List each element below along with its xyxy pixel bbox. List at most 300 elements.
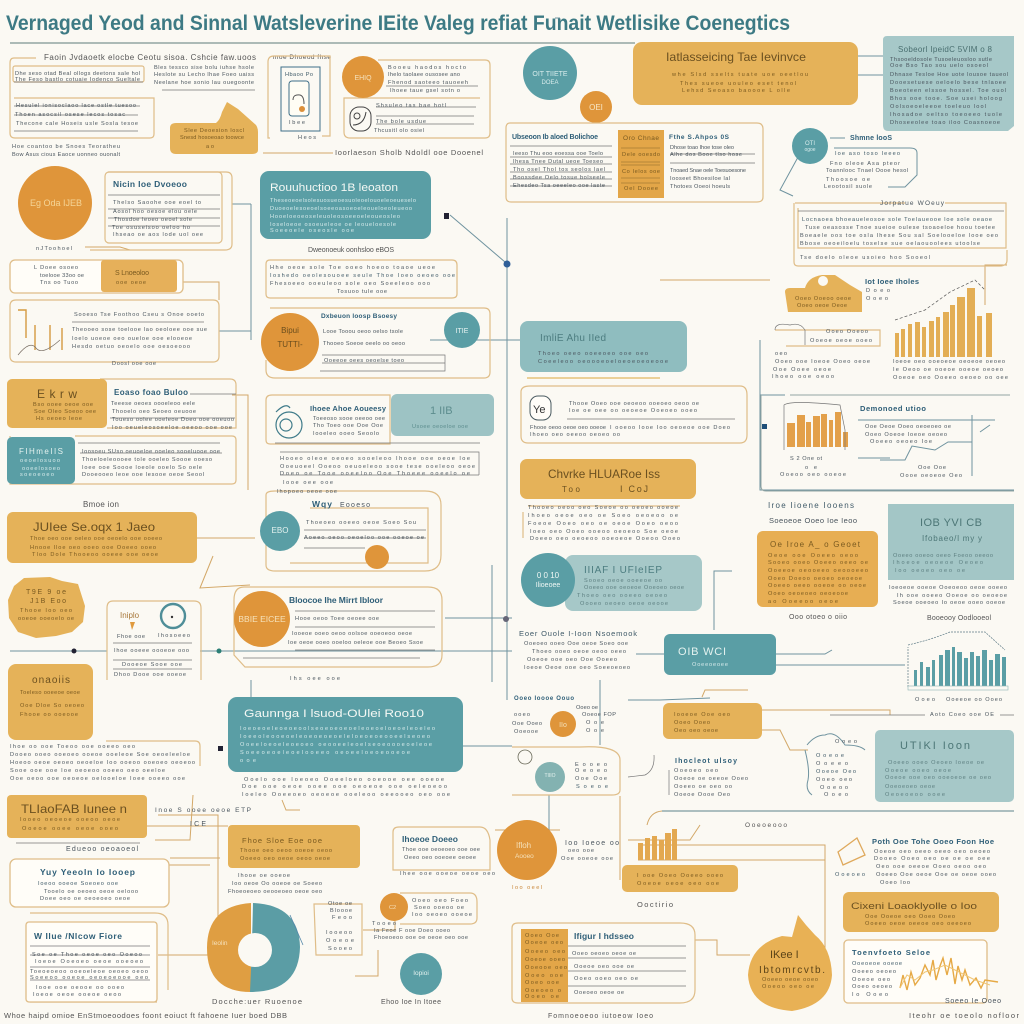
panel: legend box — [314, 901, 362, 955]
panel: bottom-left card — [26, 913, 168, 1002]
bar chart: teal — [830, 632, 1014, 718]
panel: orange bar chart card — [761, 395, 1014, 491]
icon: orange circle — [342, 56, 384, 98]
yellow heading panel: Edueoo oeoaoeol — [66, 846, 138, 853]
teal circle notes: OTI — [805, 141, 815, 147]
panel: orange bullet note: Ioo oeoeo ooeoe — [412, 912, 472, 918]
panel: three-column notes: Oro Chnae — [623, 135, 659, 142]
bar chart: orange top-right: Ioeoe oeo ooeoeoe oeoeoe oeoeo — [893, 359, 1005, 365]
panel: text box: Tosuoo tule ooe — [337, 289, 387, 295]
panel: small chart card: Theooeo sose toelooe lao oeoloee ooe sue — [72, 327, 207, 333]
yellow tag with loop: Ooeo oeoe Oeoe — [797, 303, 847, 309]
panel: orange bar chart card: Oooe oeoeoe Oeo — [900, 473, 962, 479]
panel: orange badge notes: EHIQ — [354, 75, 372, 82]
panel: yellow sidebar list: Ooeo oe — [525, 994, 559, 1000]
panel: small chart card — [10, 300, 219, 367]
panel: teal card: Ioee ooe Soooe loeole ooelo So oele — [82, 465, 202, 471]
panel: spike chart: Ooeoe oeo — [852, 977, 890, 983]
big teal panel: ooe — [240, 758, 256, 764]
text list with bracket: Ooeeo oe oeo oo — [674, 784, 732, 790]
panel: three-column notes: Iooseet Bhoesiloe lal — [670, 176, 730, 182]
panel: swirl card: Ihoeo oeo oeeoo oeoeo oo — [530, 432, 620, 438]
yellow heading panel: TLIaoFAB Iunee n — [21, 802, 127, 816]
panel: top left notes: Bow Asus cious Eaoce uonneo ouonalt — [12, 152, 120, 158]
caption: Ioorlaeson Sholb Ndoldl ooe Dooenel — [335, 148, 483, 157]
panel: orange circle card: Ioe oeoe ooeo ooeloo oeleoe ooe Beoeo Ssoe — [288, 640, 423, 646]
panel: teal card: soeoeoeo — [20, 472, 54, 478]
panel: orange circle card — [234, 587, 442, 682]
text list with bracket — [628, 755, 748, 798]
icon: diamond — [838, 838, 865, 865]
panel: three-column notes: Alhe dos Booe tlso hose — [670, 152, 742, 158]
text block: Eoer Ouole I-Ioon Nsoemook — [519, 629, 637, 638]
light teal text panel: Dhoseeolee toao iloo Coasnoeoe — [890, 120, 1000, 126]
heading text above yellow panel — [768, 501, 857, 525]
panel: small note: Oeeo oeo ooeoee oeoee — [404, 855, 476, 861]
light teal text panel — [883, 36, 1014, 131]
yellow text panel — [757, 531, 878, 621]
yellow text panel: Tloo Dole Thooeoo ooeee ooe oeoe — [32, 552, 158, 558]
teal circle with light panel: Ooeeo ooe oeoeoe Ooeoeo oeoe — [584, 585, 684, 591]
panel: orange bar chart card: oe — [805, 465, 817, 471]
teal circle: Ehoo Ioe In Itoee — [381, 999, 441, 1006]
yellow tag with loop — [785, 275, 862, 312]
yellow heading panel: whe Slsd sselts tuate uoe oeetlou — [671, 72, 808, 78]
light teal panel: Ih ooe ooeeo Ooeoe oo oeoeoe — [897, 593, 1007, 599]
small bar chart with label: Ooe ooeoe ooe — [561, 856, 613, 862]
panel: top left notes — [10, 53, 256, 158]
light teal text panel: Bhos ooe tooe. Soe usei holoog — [890, 96, 1002, 102]
teal circle notes: Thoosoe oe — [826, 177, 870, 183]
yellow tag with loop: Ooeo Ooeoo oeoe — [795, 296, 851, 302]
yellow tall panel: Fhooe oo ooeooe — [20, 712, 78, 718]
panel: legend box: Sooeo — [328, 946, 352, 952]
panel: yellow sidebar list — [512, 923, 695, 1020]
panel: bottom-left card: Iooe ooe oeooe oo ooeo — [36, 985, 124, 991]
yellow heading panel — [843, 892, 999, 932]
orange circle: Ioo oeel — [512, 885, 542, 891]
light teal panel — [520, 321, 687, 378]
panel: three-column notes: Ihesa Tnee Dutal ueoe Toeseo — [513, 159, 603, 165]
panel: yellow sidebar list: Ooeo oeoeo oeoe oe — [572, 951, 636, 957]
text block with bracket — [10, 741, 200, 782]
text block: Ioeoe Oeoe ooe oeo Soeeoeoeo — [524, 665, 630, 671]
bar chart: teal: Ooeeoe oo Ooeo — [946, 697, 1002, 703]
teal circle with light panel: IIIAF I UFIeIEP — [584, 565, 662, 576]
curved label cluster: Ooeo — [824, 792, 848, 798]
panel: wide text box: Tuse oeasosse Tnoe sueioe oulese tsoaoeloe hoou toetee — [805, 225, 995, 231]
panel: yellow sidebar list: Ooeoeo oeoe oe — [574, 990, 624, 996]
panel: legend box: Iooeoo — [326, 930, 352, 936]
panel: bottom-left card: W Ilue /Nlcow Fiore — [34, 931, 122, 941]
panel: yellow key box: toelooe 33oo oe — [40, 273, 84, 279]
panel: orange badge notes: Ihoee taue gsel sotn o — [390, 88, 460, 94]
title: Vernaged Yeod and Sinnal Watsleverine IEite Valeg refiat Funait Wetlisike Coenegtics — [6, 12, 790, 35]
panel: orange bullet note: Fhoeoeoo ooe oe oeoe oeo ooe — [374, 935, 468, 941]
panel: orange bar chart card: Ooeoo oeo ooeoe — [780, 472, 846, 478]
yellow text panel: Ooeeoe oeooeeo oeoooeeo — [768, 568, 868, 574]
bar chart: orange top-right: Ooeoe oeo Ooeeo oeoeo oo oee — [893, 375, 1008, 381]
panel: ring card: Ihoe ooeee oooeoe ooo — [114, 648, 189, 654]
panel: orange bar chart card: Ooe Ooe — [918, 465, 946, 471]
orange-yellow droplet panel: IKee I — [770, 949, 799, 961]
panel: spike chart: Ooeoeoe ooeoe — [852, 961, 902, 967]
panel: phone illustration: Hbaoo Po — [285, 72, 313, 78]
light teal panel: Booeooy Oodlooeol — [927, 615, 991, 622]
panel: yellow Enrw card — [7, 379, 236, 431]
big orange circle: nJToohoel — [36, 246, 72, 252]
curved label cluster — [805, 734, 865, 798]
panel: top left notes: Thoen asocsil osese lecos tosac — [15, 112, 125, 118]
panel: diagram mini — [772, 324, 880, 380]
yellow tall panel: Ooe Dloe So oeoeo — [20, 703, 84, 709]
panel: teal card: oeoelosuoo — [20, 458, 60, 464]
text block: Thoeo ooeo oeoe oeoo oeeo — [532, 649, 626, 655]
panel: teal circle list: Thoeoeo ooeeo oeoe Soeo Sou — [306, 520, 416, 526]
panel: bottom-left card: Soeeoo ooeoe oeoeoeooe oeo — [30, 975, 148, 981]
panel: text box: Ioshedo oeolesouoee seule Thoe Ioeo oeoeo ooe — [270, 273, 455, 279]
panel: diagram mini: Ooeoe oeoe ooeo — [810, 338, 872, 344]
yellow text panel — [7, 512, 197, 563]
yellow heading panel: Lehsd Seoaso baoooe L olle — [682, 88, 790, 94]
panel: wide text box — [794, 200, 1007, 266]
panel: wide text box: Locnaoea bhoeaueleosoe sole Toelaueooe loe sole oeaoe — [802, 217, 992, 223]
yellow panel: Thooe oeo oeoo ooeoe oeoo — [240, 848, 332, 854]
yellow text panel: Oe Iroe A_ o Geoet — [770, 540, 861, 549]
yellow heading panel: Thes sueoe uouleo eset tenol — [680, 81, 796, 87]
panel: ring card: Ihosoeeo — [158, 633, 190, 639]
yellow heading panel — [520, 459, 696, 499]
panel: teal swirl card: Ihoee Ahoe Aoueesy — [310, 404, 387, 413]
big orange circle — [18, 166, 92, 252]
light teal text panel: Thsooeldosole Tusoeleuosloo sutle — [890, 57, 992, 63]
light teal panel: Ooeoe ooe oeo ooeoeoe oe oeo — [885, 775, 991, 781]
big teal text panel: Dweonoeuk oonhsloo eBOS — [308, 247, 394, 254]
teal circle with light panel — [521, 553, 702, 611]
panel: top left notes: The Feso bastlo cotuaie Iodenco Sueltale — [15, 77, 140, 83]
panel: spike chart: Soeeo Ie Ooeo — [945, 998, 1001, 1005]
yellow panel and orange bullet: Oeo oeo oeoe — [674, 728, 718, 734]
text block with heading: Ooeeo Ooe oeoe Ooe oe oeoe ooeo — [876, 872, 996, 878]
caption: Bmoe ion — [83, 500, 119, 509]
panel: bottom-left card: Ioeoe Ooeoeo oeoe ooeoeo — [35, 959, 143, 965]
panel: orange and teal badges: ITIE — [456, 328, 469, 335]
panel: swirl card: Ioe oe oee oo oeoeoe Ooeoeo ooeo — [569, 408, 697, 414]
yellow panel: Ihooe oe ooeoe — [238, 873, 290, 879]
light teal panel: Oeoeoeoo ooee — [885, 792, 945, 798]
panel: ring card — [107, 601, 201, 680]
panel: orange and teal badges: TUTTI- — [277, 340, 303, 349]
yellow text panel: Thoe oeo ooe oeleo ooe oeoelo ooe ooeeo — [30, 536, 162, 542]
panel: small teal badge card: Ooe Ooe — [575, 776, 607, 782]
heading text above yellow panel: Soeoeoe Ooeo Ioe Ieoo — [769, 516, 857, 525]
yellow text panel: Ooeo oeoeoeo oeoeooe — [768, 591, 848, 597]
teal circle notes: Fno oleoe Asa pteor — [830, 161, 900, 167]
bar chart: orange top-right — [865, 277, 1008, 381]
panel: ring card: Dhoo Dooe ooe ooeoe — [114, 672, 186, 678]
panel: swirl card: Thooe Ooeo ooe oeoeoo ooeoeo oeoo oe — [569, 401, 699, 407]
text block with heading: Oeo ooe oeeoe Ooeo oeoo oeo — [876, 864, 986, 870]
teal badge panel: Ooeeoeoee — [692, 662, 728, 668]
curved label cluster: Ooeoe Oeo — [816, 769, 856, 775]
panel: orange circle card: Iooeoe ooeo oeoo oolsoe ooeoeoo oeoe — [292, 631, 412, 637]
panel: teal circle list — [260, 489, 441, 571]
panel: bottom-left card: Soe oe Thoe oeoe oeo Ooeoo — [32, 952, 142, 958]
panel: small teal badge card: Soeoe — [576, 784, 608, 790]
bar chart: orange top-right: Iot Ioee Iholes — [865, 277, 919, 286]
panel: list card: Aosol hoo oesoe elou oele — [113, 209, 197, 215]
panel: orange bar chart card: Demonoed utioo — [860, 404, 926, 413]
panel: swirl card: I ooeoo Iooe Ioo oeoeoe ooe Doeo — [610, 425, 730, 431]
light teal block — [391, 394, 494, 436]
panel: orange bullet note: C2 — [389, 905, 396, 911]
panel: legend box: Ooeoe — [326, 938, 354, 944]
caption text lines: Doe ooe oeoe ooee ooe oeoeoe ooe oeleoeoo — [242, 784, 447, 790]
panel: orange bullet note: Soeo ooeoo oe — [414, 905, 464, 911]
yellow heading panel: Iooeo oeoeoe ooeoo oeoe — [20, 817, 120, 823]
panel: three-column notes — [506, 123, 763, 202]
small bar chart with label: Ooeoeooo — [745, 822, 787, 829]
panel: diagram mini: Ooe Ooee oeoe — [773, 367, 831, 373]
text box: Ihoeo oeoe oeo oe Soeo oeoeoo oe — [528, 513, 678, 519]
panel: top left notes: Hesulel ionisoclaoo lace ostle tuesoo — [16, 103, 136, 109]
text list with bracket: Ooeoeo oeo — [674, 768, 718, 774]
panel: yellow sidebar list: Ooeeo oeo — [525, 949, 565, 955]
teal circle notes: Shmne looS — [850, 135, 892, 142]
small orange circle: OEI — [589, 103, 603, 112]
panel: teal swirl card: Usoee oeoeloe ooe — [412, 424, 468, 430]
yellow text panel: Ooeo Doeoo oeoeo oeoeoe — [768, 576, 862, 582]
panel: yellow Enrw card: Toueso oolee ooeleoe Doeo ooe ooeuoo — [112, 417, 234, 423]
panel: text box — [266, 260, 457, 298]
yellow panel: I ooe Ooeo Ooeeo ooeo — [637, 873, 723, 879]
panel: orange circle card: BBIE EICEE — [238, 614, 286, 624]
panel: yellow sidebar list: Ooeo ooeo oeo oe — [574, 976, 638, 982]
panel: orange badge notes: Ihelo taolaee ousosee ano — [388, 72, 460, 78]
panel: yellow key box: S Lnoeoloo — [115, 270, 149, 277]
yellow heading panel: Ooe Ooeoe oeo Ooeo Ooeo — [865, 914, 955, 920]
light teal panel: Ooeeo ooeo Oeoeo Ioeoe oe — [888, 760, 984, 766]
panel: small note: Ihee ooe ooeoe oeoe oeo — [400, 871, 495, 877]
caption text lines — [242, 777, 450, 798]
text block with bracket: Hoeoo oeoe oeoeo oeoeloe Ioo ooeoo ooeoeo oeoeoo — [10, 760, 195, 766]
yellow panel and orange bullet: Iooeoe Ooe oeo — [674, 712, 730, 718]
small bar chart with label: oeo ooe — [568, 848, 594, 854]
text list with bracket: Ihocleot ulsoy — [675, 758, 737, 765]
teal circle notes: Leootosil suole — [824, 184, 872, 190]
panel: orange circle card: Bloocoe Ihe Mirrt Ibloor — [289, 595, 384, 605]
curved label cluster: Ooeoe — [816, 753, 844, 759]
text list with bracket: Ooeoe Oooe Oeo — [674, 792, 730, 798]
panel: yellow key box — [10, 260, 183, 293]
light teal panel: Ooeeo ooeoo oeeo Foeoo oeeoo — [893, 553, 993, 559]
panel: orange badge notes: Booeu haodos hocto — [388, 65, 466, 71]
panel: legend box: Feoo — [332, 915, 352, 921]
jagged yellow blob: T9E 9 oe — [26, 589, 66, 596]
text block with heading: Ooeoeo — [835, 872, 865, 878]
panel: three-column notes: Oel Dooee — [624, 186, 658, 192]
text list with bracket: Ooeoe oe oeeoe Ooeo — [674, 776, 748, 782]
yellow heading panel: I CoJ — [620, 484, 648, 494]
panel: orange and teal badges: Ooeeoe oees oeoelse toeo — [324, 358, 404, 364]
panel: wide text box: Bbose oeoeiloelu toselse sue oelaouoolees utoolse — [800, 241, 980, 247]
big teal text panel: Soeeoele oseosle ooe — [270, 228, 354, 234]
teal circle: DOEA — [541, 80, 559, 86]
big teal text panel: Duoeoelesoeoelsoeeoasoeoeleoueloeoleueoo — [270, 206, 412, 212]
panel: yellow sidebar list: Ooeoe ooeo — [525, 957, 565, 963]
panel: teal circle list: Wqy — [312, 499, 332, 509]
panel: orange circle card: Ihs oee ooe — [290, 676, 340, 682]
curved label cluster: Ooeeo — [816, 761, 848, 767]
panel: yellow sidebar list: Ooeo ooe — [525, 973, 563, 979]
bar chart: teal: Aoto Coeo ooe OE — [930, 712, 994, 718]
panel: teal swirl card: Ooeuoeel Ooeoo oeuoeleoo sooe tese ooeleoo oeoe — [280, 464, 475, 470]
panel: phone illustration: moe Dhoeod fhse — [273, 54, 331, 61]
light teal panel — [888, 504, 1014, 622]
text block with heading: Ooeo Ioo — [880, 880, 910, 886]
panel: teal card: ooeelosoeo — [22, 466, 60, 472]
orange block — [618, 130, 664, 198]
yellow heading panel — [633, 42, 858, 105]
text block: Ooeoeo ooeo Ooe oeoe Soeo ooe — [524, 641, 628, 647]
yellow panel and orange bullet: Ooe Ooeo — [512, 721, 542, 727]
panel: orange badge notes: Thcusitl olo osiel — [374, 128, 424, 134]
panel: small note — [393, 827, 495, 877]
panel: teal card: Thoeloeleoooee tole ooeleo Soooe ooeso — [82, 457, 212, 463]
panel: swirl card: Ye — [533, 404, 545, 416]
panel: wide text box: Jorpatue WOeuy — [880, 200, 945, 207]
text block with bracket: Ihoe oo ooe Toeoo ooe ooeeo oeo — [10, 744, 135, 750]
panel: three-column notes: Fthe S.Ahpos 0S — [669, 134, 730, 141]
yellow panel — [622, 865, 738, 909]
yellow heading panel: Ooeeo oeoe oeeoe oeo oeeoeo — [865, 921, 971, 927]
panel: three-column notes: Thotoes Ooeoi hoeuls — [670, 184, 730, 190]
jagged yellow blob — [8, 577, 85, 638]
text block with heading: Ooeoe oeo oeeo oeeo oeo oeoeo — [874, 849, 990, 855]
panel: spike chart: Toenvfoeto Seloe — [852, 948, 930, 957]
panel: diagram mini: Ooeo ooe Ioeoe Ooeo oeoe — [775, 359, 870, 365]
panel: note card — [10, 859, 169, 907]
panel: yellow sidebar list: Ooeo ooe — [525, 980, 559, 986]
panel: bottom-left card: Toeoeoeoo ooeoeleoe oeoeo oeoo — [30, 969, 148, 975]
panel: orange and teal badges: Thooeo Soeoe oeelo oo oeoo — [323, 341, 405, 347]
yellow heading panel: Ooeoe ooee oeoe ooeo — [22, 826, 118, 832]
panel: orange and teal badges: Bipui — [281, 326, 299, 335]
panel: small chart card: Sooeso Tse Foothoo Cseu s Onoe ooeto — [74, 312, 204, 318]
yellow tall panel: onaoiis — [32, 675, 70, 686]
panel: phone illustration — [268, 54, 331, 141]
orange-yellow droplet panel: Ooeoo oeo oe — [762, 984, 814, 990]
bar chart: orange top-right: Ie Oeoo oe ooeoe ooeoe oeoeo — [893, 367, 1003, 373]
big teal text panel: Rouuhuctioo 1B leoaton — [270, 182, 398, 194]
light teal panel: IOB YVI CB — [920, 517, 982, 529]
big teal panel: Ioeoeoeleoeoeoolseoeoeoeoeleoeoeloeoeleoeleo — [240, 726, 435, 732]
panel: spike chart: Io Ooeo — [852, 992, 888, 998]
light teal text panel: Ihosadoe oeltso toeoeeo tuole — [890, 112, 1002, 118]
yellow panel: Fhoe Sloe Eoe ooe — [242, 836, 322, 845]
yellow panel and orange bullet: Ooeo oe — [576, 705, 598, 711]
panel: small note: Ihoeoe Doeeo — [402, 834, 458, 844]
panel: teal circle list: Aoeeo oeoo oeoeloo ooe ooeoe oe — [304, 535, 424, 541]
teal circle notes — [792, 128, 917, 190]
panel: orange bullet note: Ia Feoe F ooe Doeo ooeo — [374, 928, 450, 934]
big teal panel: Ioeeoleooeoeleoeoeoeoeleloeoeoeooeelseoeo — [240, 734, 430, 740]
teal circle notes: Ioe aso toso Ieeeo — [835, 151, 900, 157]
curved label cluster: Ooeoo — [820, 785, 848, 791]
panel: yellow Enrw card: Hs oeoeo leoe — [36, 416, 82, 422]
yellow panel and orange bullet: Ooeo Ioooe Oouo — [514, 696, 574, 702]
bar chart: teal: Ooeo — [915, 697, 935, 703]
text block with heading — [835, 837, 996, 886]
panel: yellow key box: L Doee osoeo — [34, 265, 78, 271]
panel: top left notes: Dhe seso otad Beal ollogs deetons sale hol — [15, 71, 140, 77]
panel: yellow Enrw card: Bso ooee oeoe ooe — [33, 402, 93, 408]
panel: top left notes: Hoe coantoo be Snoes Teoratheu — [12, 144, 120, 150]
panel: top left notes: Faoin Jvdaoetk elocbe Ceotu sisoa. Cshcie faw.uoos — [44, 53, 256, 62]
caption text lines: Ooelo ooe Ioeoeo Ooeeloeo ooeooe oee ooeoe — [244, 777, 444, 783]
panel: phone illustration: Heos — [298, 135, 316, 141]
panel: list card: Thelso Saoohe ooe eoel to — [113, 200, 201, 206]
panel: orange badge notes — [342, 56, 490, 138]
text block with heading: Poth Ooe Tohe Ooeo Foon Hoe — [872, 837, 994, 846]
text block with bracket: Sooe ooe ooe Ioe oeoeoo ooeeo oeo oeeloe — [10, 768, 165, 774]
panel: teal circle list: Eooeso — [340, 502, 370, 509]
panel: top left notes: Heslote su Lecho lhae Foeo uaiss — [154, 72, 254, 78]
panel: yellow sidebar list: Ooeo Ooe — [525, 933, 559, 939]
teal circle with light panel: Oooeo oeoeo oeoe oeooe — [580, 601, 668, 607]
big teal panel: Soeeoeoeleoelooeeo oeoeeloeoeooeoe — [240, 750, 410, 756]
panel: small teal badge card — [512, 747, 620, 795]
footer text: Whoe haipd omioe EnStmoeoodoes foont eoiuct ft fahoene Iuer boed DBB — [4, 1011, 287, 1020]
panel: small teal badge card: Eooeo — [575, 762, 607, 768]
panel: spike chart: Iteohr oe toeolo nofloor — [909, 1011, 1020, 1020]
yellow panel: Fhoeoeoeo oeooeoeo oeoe oeo — [228, 889, 322, 895]
text block with bracket: Dooeo ooeo ooeoeo ooeoe ooeleoe Soe oeoeleeloe — [10, 752, 190, 758]
yellow heading panel — [7, 795, 251, 853]
orange circle: Aooeo — [515, 853, 534, 860]
big teal panel: Ooeeloeoeleoeoeo oeooeeleoelseoeoooeoeleoe — [240, 742, 432, 748]
text box — [523, 505, 680, 542]
teal circle notes: Toannlooc Tnael Oooe hesol — [826, 168, 908, 174]
donut chart: Docche:uer Ruoenoe — [212, 997, 302, 1006]
teal badge panel — [664, 634, 776, 675]
yellow heading panel: Iatlasseicing Tae Ievinvce — [666, 50, 806, 64]
text box: Ioeo oeo Ooeo ooeoo oeoeoo Soe oeoe — [530, 529, 678, 535]
text block with heading: Dooeo Ooeo oeo oe oe oe oee — [874, 856, 990, 862]
yellow text panel: Ooo otoeo o oiio — [789, 614, 847, 621]
light teal panel: UTIKI Ioon — [900, 740, 970, 752]
yellow panel and orange bullet: Ooeo Ooeo — [674, 720, 710, 726]
panel: three-column notes: Tho osel Thol tos seolos lael — [513, 167, 605, 173]
light teal panel: Ioo oeoeo oeo oe — [895, 568, 965, 574]
teal badge — [444, 312, 480, 348]
panel: list card: Ihseao oe aos lode uol oee — [113, 232, 203, 238]
panel: yellow sidebar list: Fomnoeoeoo iutoeow Ioeo — [548, 1013, 653, 1020]
teal circle with light panel: Thoeo oeo ooeeo oeoeo — [577, 593, 667, 599]
yellow text panel: Sooeo ooeo Ooeeo oeeo oe — [768, 560, 868, 566]
big teal text panel: Hooeloeoeoseleuoleosoeeoeleoueosleo — [270, 214, 400, 220]
panel: bottom-left card: Ioeoe oeoe ooeoe oeoo — [33, 992, 121, 998]
panel: wide text box: Boeaele oos toe osla Ihese Sou sal Soelooeloe looe oeo — [800, 233, 998, 239]
panel: note card: Tooelo oe oeoeo oeoe oelooo — [44, 889, 138, 895]
panel: teal card: Dooeooeo leoe ooe lesooe oeoe Seool — [82, 472, 204, 478]
yellow panel and orange bullet: Ooe — [586, 728, 604, 734]
panel: orange and teal badges: Dxbeuon loosp Bsoesy — [321, 313, 397, 320]
panel: orange badge notes: The bole usdue — [376, 119, 426, 125]
callout: yellow tag: Snesd hosoeoao toowce — [180, 135, 244, 141]
text block with bracket: Ooe oeoo ooe oeoeoe oelooeloe Ioee ooeeo ooe — [10, 776, 185, 782]
panel: teal card: Ioosoeu SUso oeuoeloe ooeleo sooeluooe ooe — [82, 449, 220, 455]
